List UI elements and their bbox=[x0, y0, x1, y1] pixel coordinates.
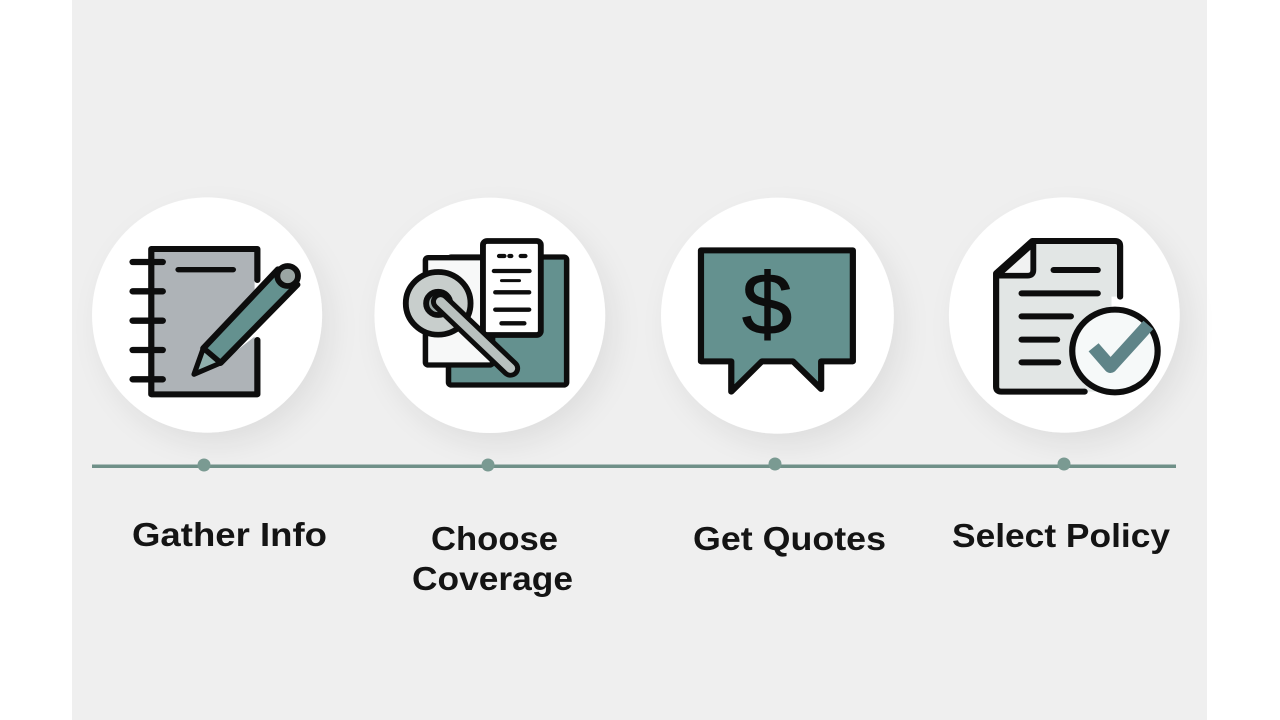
label: choose coverage: Choose bbox=[431, 520, 558, 557]
label: choose coverage bbox=[412, 520, 573, 597]
icon: document with check mark bbox=[996, 241, 1158, 392]
label: gather info: Gather Info bbox=[132, 516, 327, 553]
icon: speech bubble with dollar: $ bbox=[742, 254, 792, 353]
circle badge 1 bbox=[92, 197, 322, 433]
circle badge 3 bbox=[661, 198, 894, 434]
circle badge 2 bbox=[374, 198, 605, 433]
step 1: gather info icon bbox=[92, 197, 322, 433]
step 2: choose coverage icon bbox=[374, 198, 605, 433]
step 4: select policy icon bbox=[949, 197, 1180, 433]
circle badge 4 bbox=[949, 197, 1180, 433]
timeline with step markers bbox=[92, 458, 1176, 472]
step 3: get quotes icon bbox=[661, 198, 894, 434]
icon: documents and dial bbox=[406, 241, 567, 385]
label: select policy: Select Policy bbox=[952, 517, 1171, 554]
icon: notebook and pencil bbox=[133, 249, 298, 394]
step labels bbox=[132, 516, 1171, 597]
icon: speech bubble with dollar bbox=[701, 250, 853, 392]
label: get quotes: Get Quotes bbox=[693, 520, 886, 557]
label: choose coverage: Coverage bbox=[412, 560, 573, 597]
